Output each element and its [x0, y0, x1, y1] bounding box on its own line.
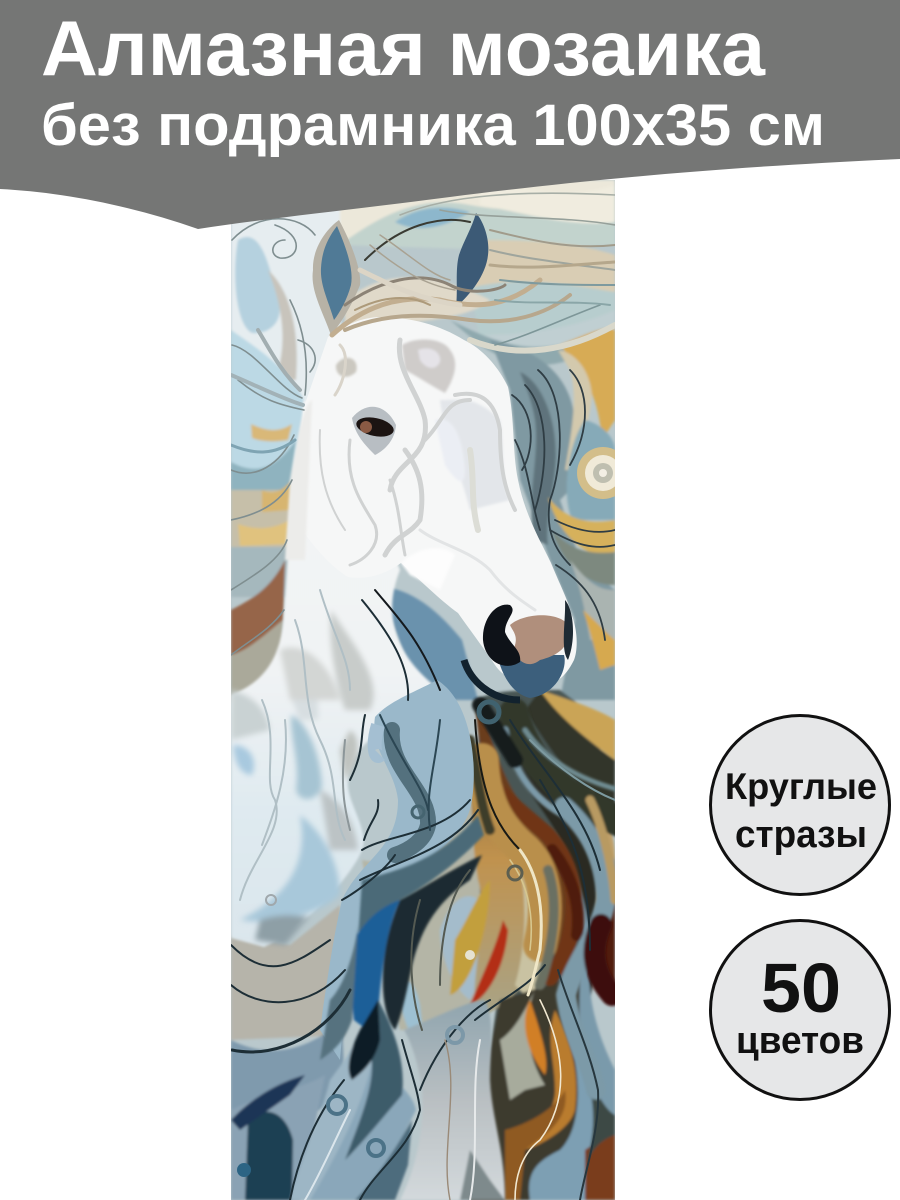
mane fine lines — [240, 590, 350, 900]
mane swirl, right — [577, 447, 615, 499]
mane line work, upper — [231, 219, 315, 655]
artwork: white horse with flowing mane — [231, 180, 629, 1200]
subtitle: без подрамника 100х35 см — [41, 93, 825, 158]
right mane strands — [470, 705, 620, 1090]
forehead swirls and face shading — [285, 340, 510, 590]
horse head — [291, 317, 577, 685]
upper background and mane colours — [231, 180, 615, 1200]
neck and white mane — [231, 400, 440, 947]
forelock strands over the head — [332, 193, 615, 351]
badge: round rhinestones: стразы — [735, 814, 867, 856]
lower background — [231, 905, 345, 1040]
small swirls — [237, 806, 522, 1177]
halter rings — [464, 660, 520, 722]
mane shading — [231, 610, 374, 945]
badge: 50 colours: цветов — [736, 1020, 864, 1062]
mane line work, lower — [231, 590, 615, 1200]
badge: round rhinestones — [710, 716, 890, 894]
horse ears — [313, 213, 488, 335]
light blue flowing strand — [320, 680, 474, 1060]
badge: round rhinestones: Круглые — [725, 766, 877, 807]
badge: 50 colours — [710, 920, 890, 1100]
face line work — [320, 340, 535, 610]
nose and mouth — [483, 600, 573, 698]
title: Алмазная мозаика — [41, 4, 766, 92]
eye — [352, 407, 396, 455]
header banner — [0, 0, 900, 229]
lower centre strands — [290, 815, 505, 1200]
badge: 50 colours: 50 — [761, 949, 841, 1027]
